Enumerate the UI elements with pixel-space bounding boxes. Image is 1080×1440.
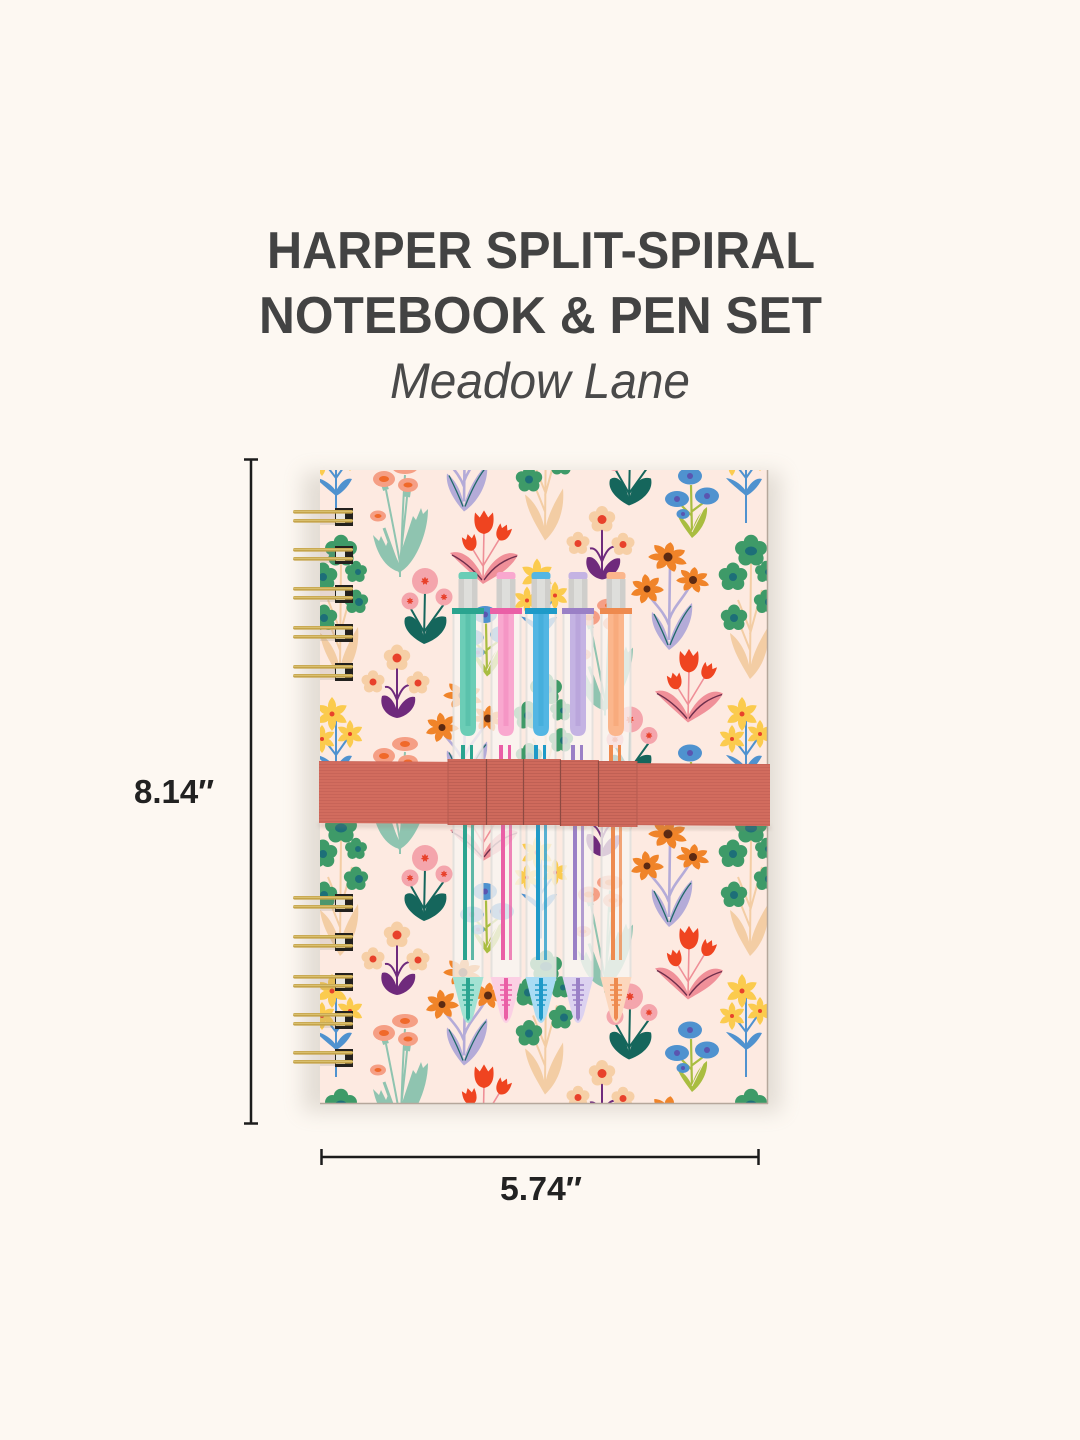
- spiral binding bottom: [293, 894, 353, 1067]
- pen: purple: [562, 572, 594, 1023]
- title: [259, 222, 822, 345]
- pen set: [452, 572, 632, 1023]
- cover edges: [320, 470, 768, 1104]
- spiral binding top: [293, 508, 353, 681]
- pen: orange: [600, 572, 632, 1023]
- notebook cover: [320, 470, 768, 1104]
- pen: pink: [490, 572, 522, 1023]
- title: HARPER SPLIT-SPIRAL: [267, 222, 815, 280]
- pen: teal: [452, 572, 484, 1023]
- width label: 5.74″: [500, 1170, 582, 1207]
- notebook shadow: [303, 472, 781, 1112]
- notebook: [320, 470, 768, 1104]
- title: NOTEBOOK & PEN SET: [259, 287, 822, 345]
- height label: 8.14″: [134, 773, 214, 810]
- pen: blue: [525, 572, 557, 1023]
- width dimension line: [321, 1149, 759, 1165]
- main strap: [319, 761, 770, 826]
- floral pattern: [320, 470, 767, 1103]
- elastic band: [319, 759, 770, 830]
- subtitle: Meadow Lane: [390, 353, 690, 409]
- height dimension line: [244, 459, 258, 1124]
- band shadow: [319, 823, 770, 830]
- pen loops: [448, 759, 637, 827]
